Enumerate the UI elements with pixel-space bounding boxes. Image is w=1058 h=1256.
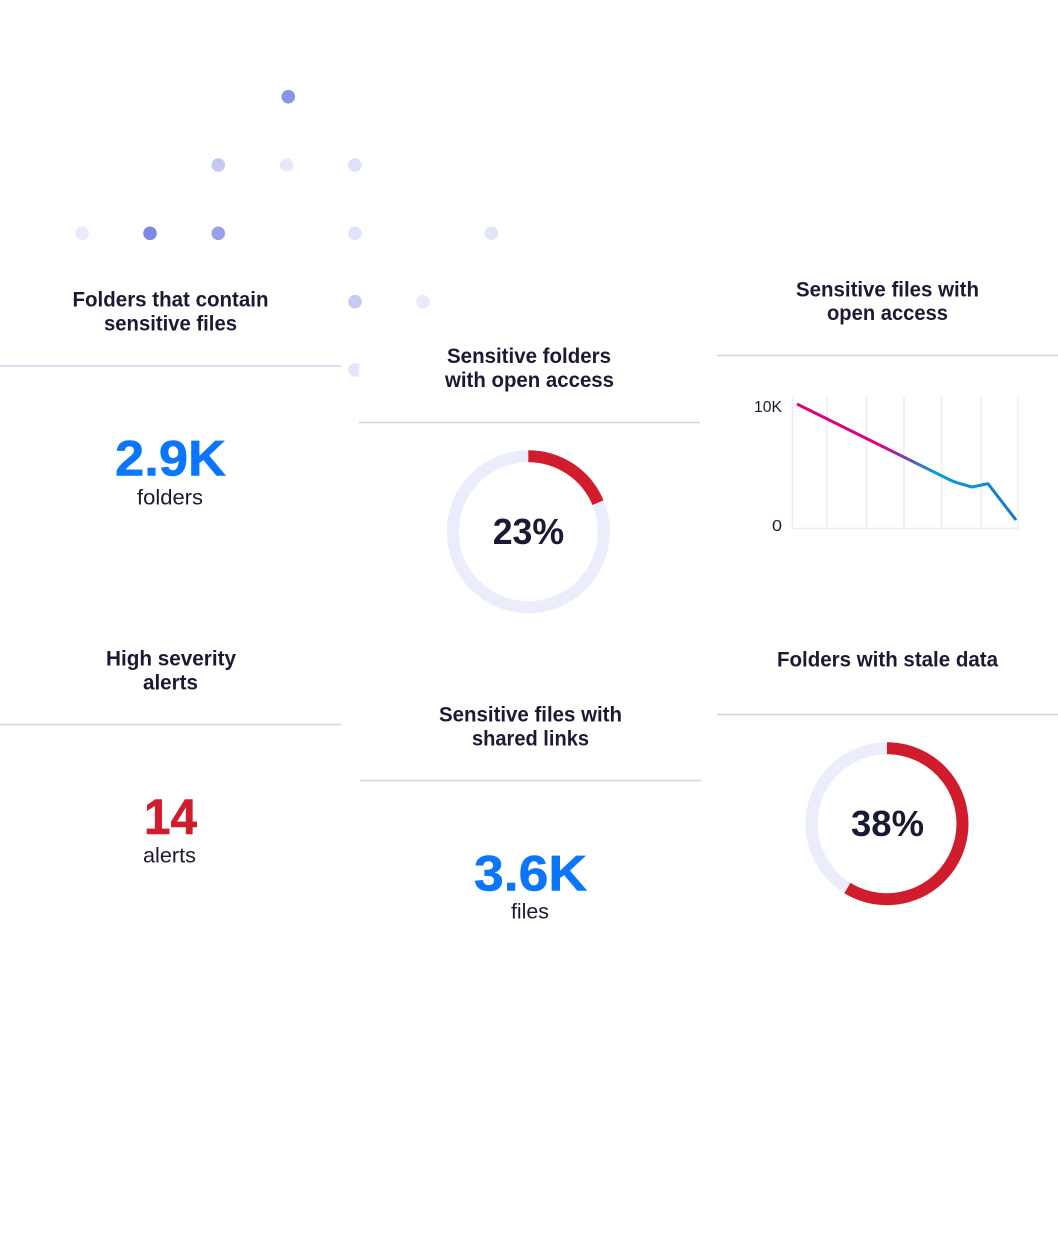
heading: sensitive folders with open access: Sensitive folders [447, 345, 611, 368]
line chart: declining from 10K toward 0: 0 [772, 518, 782, 535]
heading: folders that contain sensitive files: sensitive files [104, 312, 237, 336]
panel: high severity alerts [0, 648, 341, 868]
heading: folders that contain sensitive files [72, 288, 268, 336]
stat: 2.9K folders: folders [137, 486, 203, 510]
heading: sensitive files with shared links: Sensitive files with [439, 704, 622, 726]
heading: sensitive files with open access: open access [827, 302, 948, 325]
heading: sensitive folders with open access: with open access [444, 369, 614, 392]
heading: high severity alerts: alerts [143, 672, 198, 694]
donut chart: 38%: 38% [851, 803, 924, 844]
stat: 3.6K files: files [511, 900, 549, 924]
panel: folders with stale data [717, 648, 1058, 899]
heading: sensitive files with open access: Sensitive files with [796, 278, 979, 302]
heading: sensitive files with shared links: shared links [472, 728, 589, 750]
heading: folders with stale data: Folders with stale data [777, 648, 998, 672]
panel: sensitive folders with open access [358, 345, 700, 607]
panel: sensitive files with shared links [360, 704, 701, 924]
heading: folders that contain sensitive files: Folders that contain [72, 288, 268, 312]
decorative dot pattern [75, 90, 498, 377]
stat: 3.6K files [474, 846, 587, 924]
stat: 14 alerts: alerts [143, 844, 196, 868]
panel: folders that contain sensitive files [0, 288, 341, 510]
heading: sensitive files with shared links [439, 704, 622, 750]
stat: 2.9K folders [115, 430, 226, 510]
stat: 14 alerts: 14 [144, 789, 197, 845]
stat: 2.9K folders: 2.9K [115, 430, 226, 486]
donut chart: 38% [812, 748, 962, 899]
stat: 14 alerts [143, 789, 197, 868]
heading: high severity alerts [106, 648, 236, 694]
heading: high severity alerts: High severity [106, 648, 236, 670]
panel: sensitive files with open access [717, 278, 1058, 535]
donut chart: 23%: 23% [493, 511, 564, 552]
line chart: declining from 10K toward 0: 10K [754, 399, 782, 416]
donut chart: 23% [453, 456, 604, 607]
heading: sensitive files with open access [796, 278, 979, 325]
stat: 3.6K files: 3.6K [474, 846, 587, 902]
line chart: declining from 10K toward 0 [754, 397, 1018, 535]
heading: sensitive folders with open access [444, 345, 614, 392]
